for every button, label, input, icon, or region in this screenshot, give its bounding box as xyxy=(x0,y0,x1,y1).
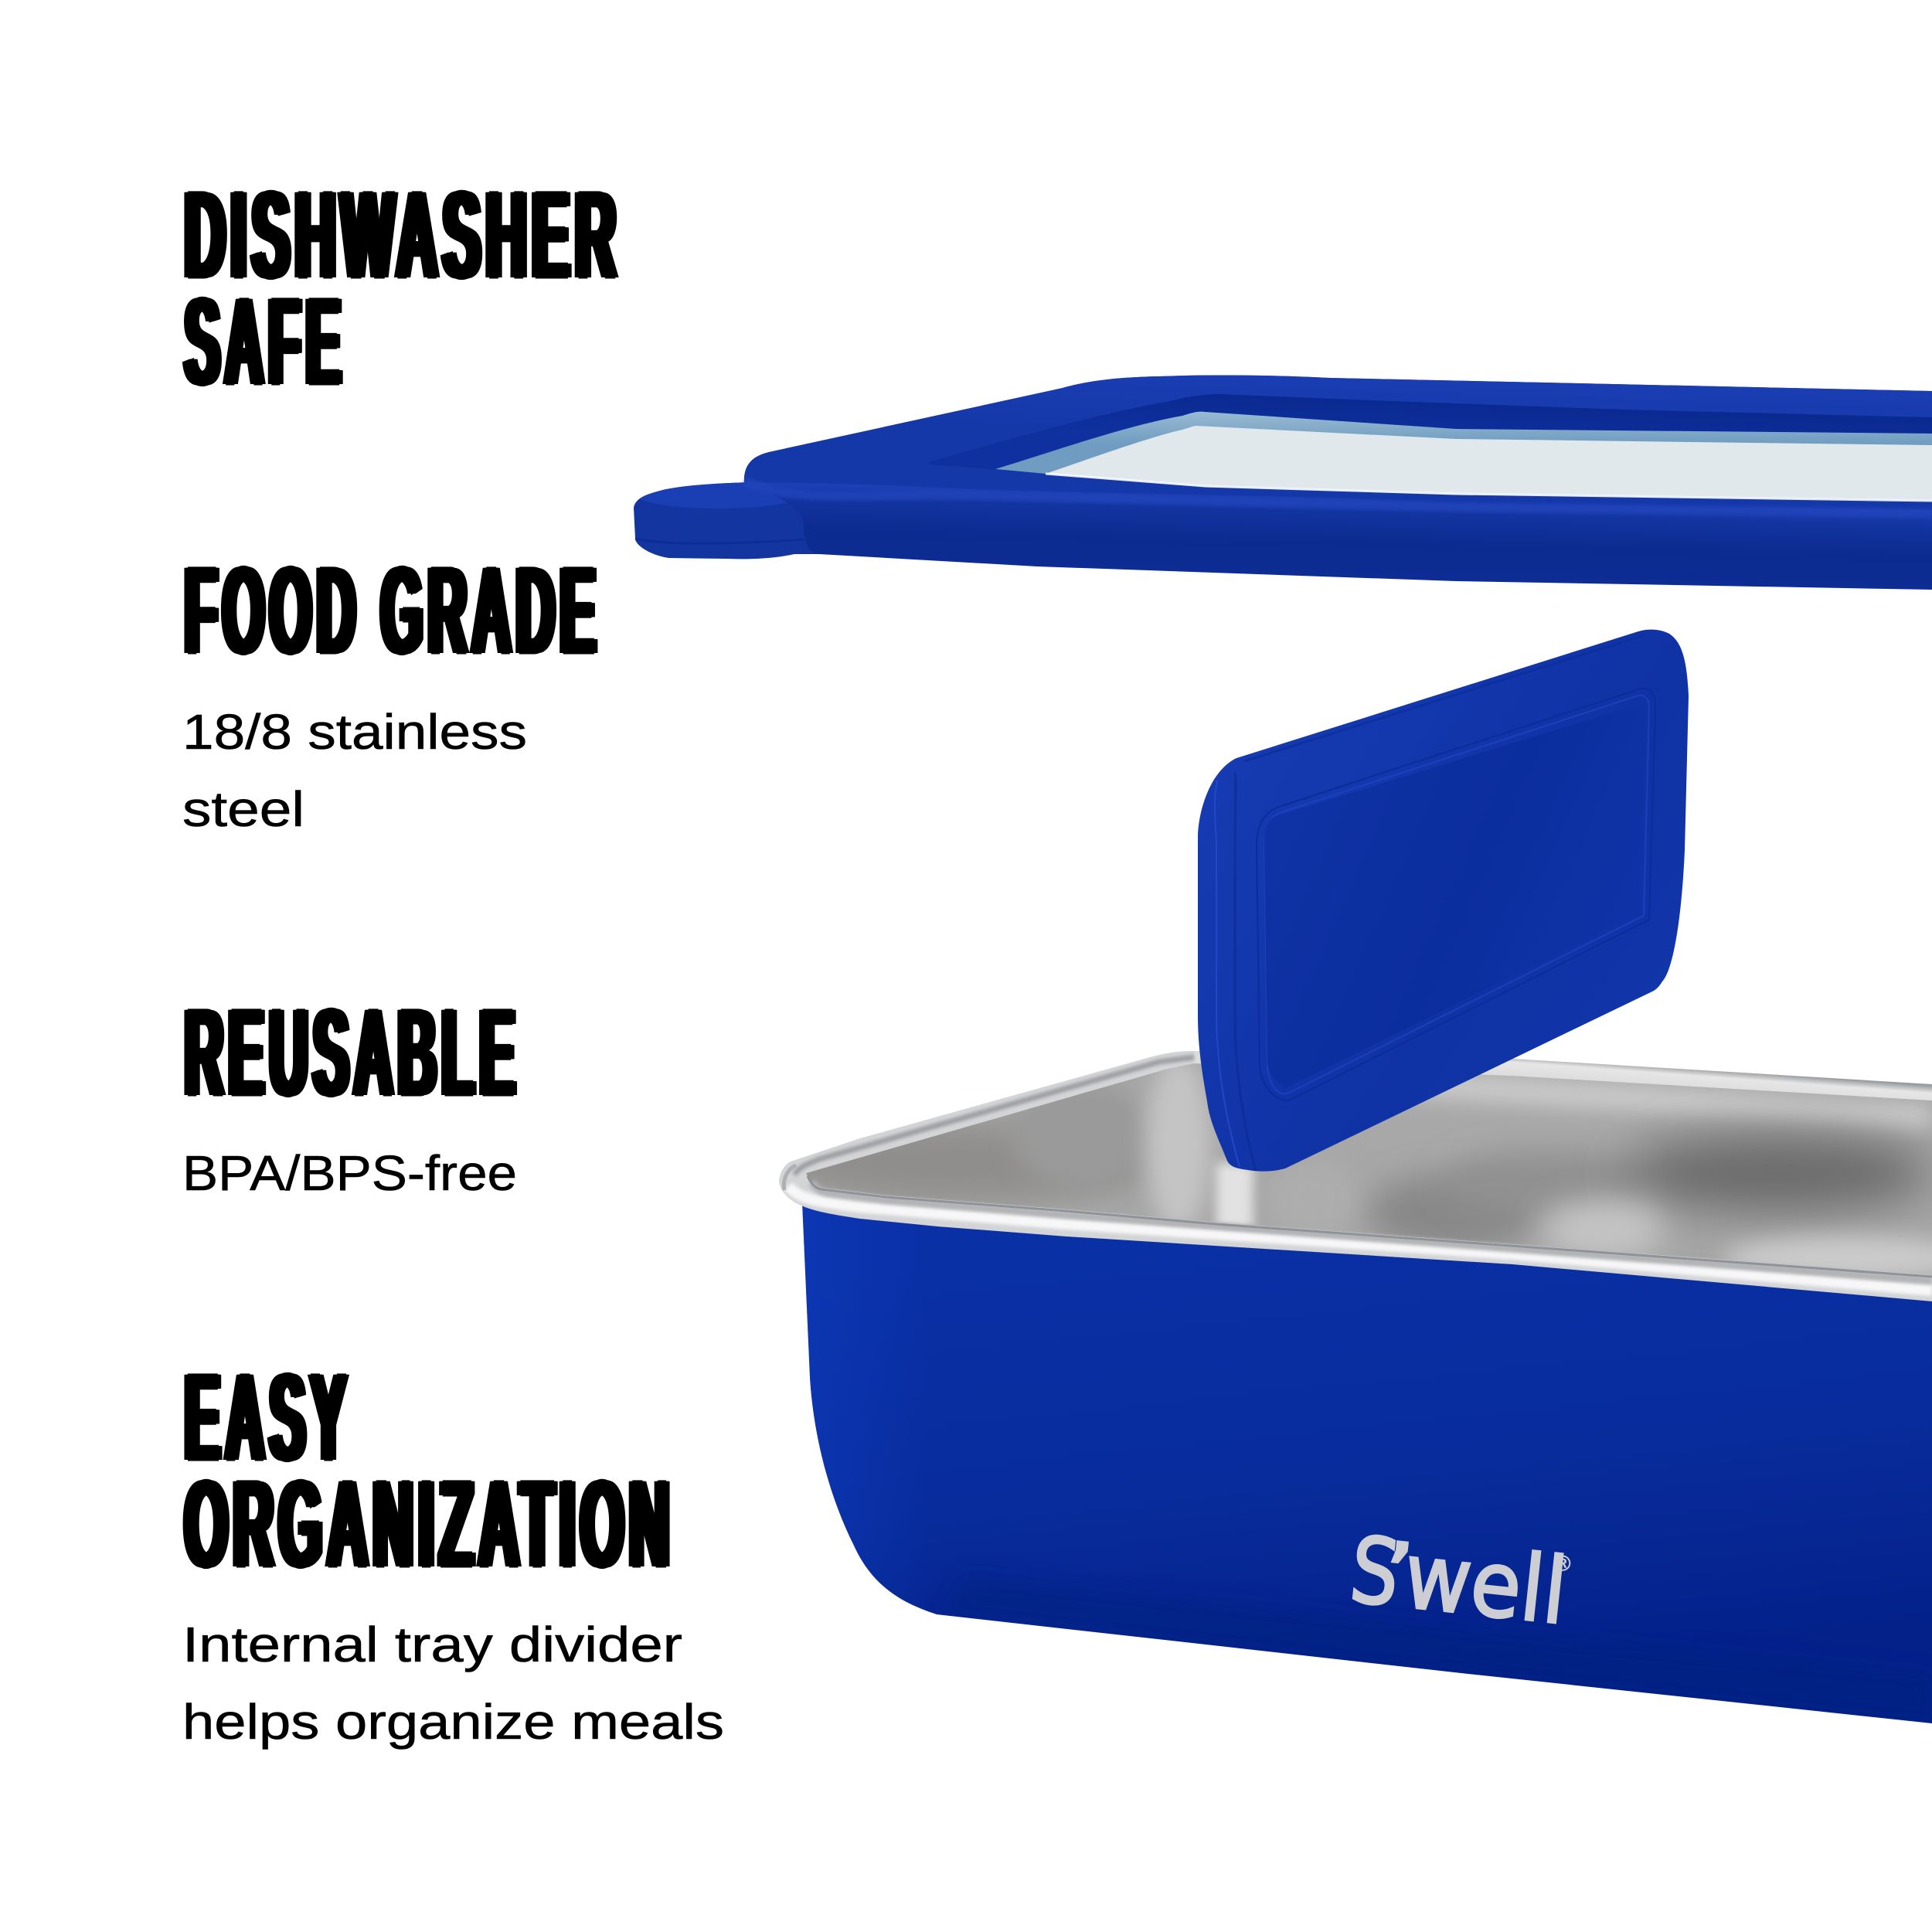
heading: Easy organization: EASY xyxy=(185,1348,352,1486)
text: Internal tray divider helps organize meals: Internal tray divider xyxy=(182,1617,682,1672)
heading: Easy organization: ORGANIZATION xyxy=(185,1454,675,1593)
heading: Dishwasher safe xyxy=(182,165,621,410)
text: 18/8 stainless steel xyxy=(182,704,527,837)
logo: S'well xyxy=(1345,1516,1576,1645)
logo: S'well: S xyxy=(1345,1516,1404,1628)
divider inner recess xyxy=(1264,704,1645,1088)
tray xyxy=(773,1036,1932,1723)
logo: S'well: well xyxy=(1400,1522,1572,1645)
text: BPA/BPS-free: BPA/BPS-free xyxy=(182,1145,517,1201)
lid recess xyxy=(928,394,1932,502)
heading: Easy organization xyxy=(182,1348,675,1593)
lid glass band xyxy=(995,412,1932,501)
tray interior steel xyxy=(773,1036,1932,1298)
product illustration: tray, divider and lid xyxy=(634,376,1932,1723)
lid xyxy=(634,376,1932,590)
lid glass pane xyxy=(1046,426,1932,500)
lid tab xyxy=(634,481,819,559)
text: 18/8 stainless steel: steel xyxy=(182,781,304,837)
text: Internal tray divider helps organize meals xyxy=(182,1617,724,1750)
tray steel rim xyxy=(779,1051,1932,1301)
heading: Dishwasher safe: SAFE xyxy=(185,272,346,410)
heading: Reusable: REUSABLE xyxy=(185,983,520,1121)
logo: S'well: ® xyxy=(1551,1551,1574,1577)
text: Internal tray divider helps organize meals: helps organize meals xyxy=(182,1694,724,1750)
heading: Dishwasher safe: DISHWASHER xyxy=(185,165,621,304)
lid highlight ridge xyxy=(745,481,1932,513)
divider panel xyxy=(1198,630,1689,1172)
tray body xyxy=(796,1198,1932,1723)
lid top surface xyxy=(744,376,1932,510)
text: 18/8 stainless steel: 18/8 stainless xyxy=(182,704,527,760)
logo: S'well: ’ xyxy=(1381,1526,1418,1614)
heading: Food grade: FOOD GRADE xyxy=(185,541,601,679)
